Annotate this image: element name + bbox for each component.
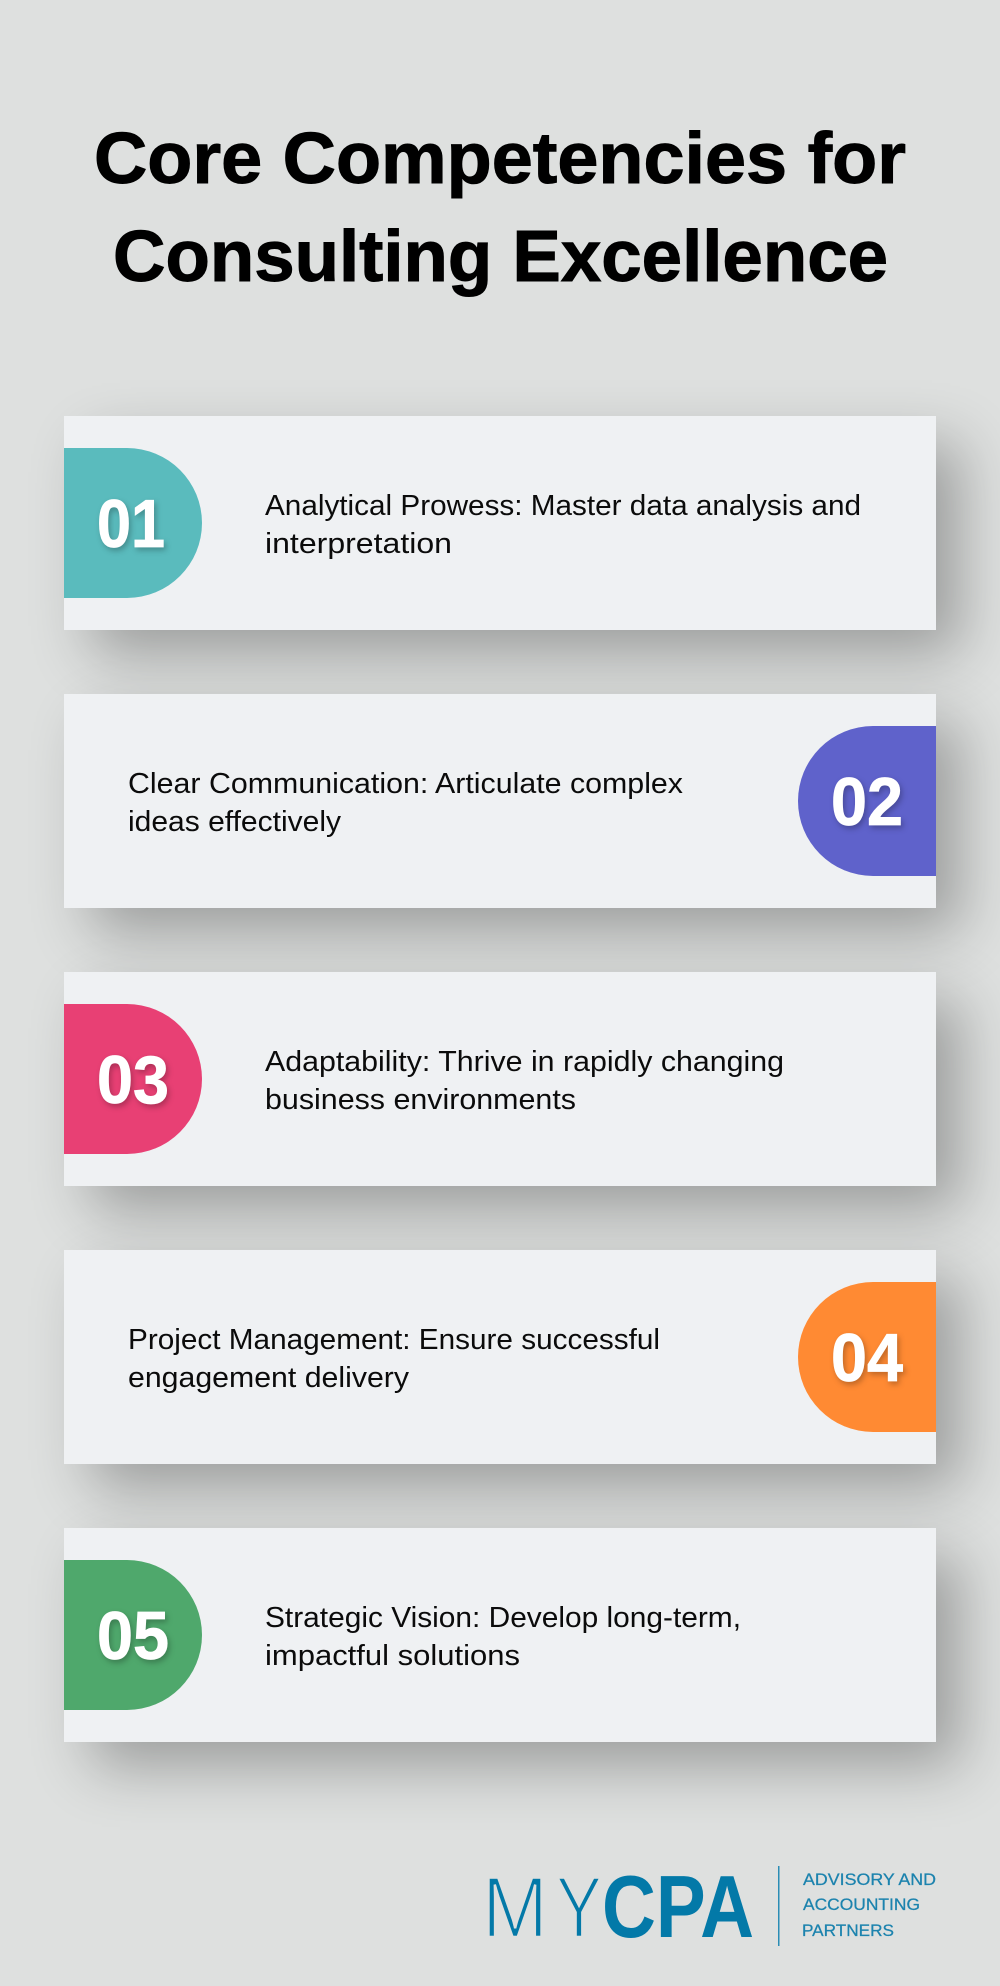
- text: project management: [128, 1324, 660, 1394]
- text: clear communication: ideas effectively: [128, 806, 342, 838]
- badge 03: [64, 1004, 202, 1154]
- logo: MYCPA: Y: [556, 1860, 602, 1956]
- title: Core Competencies for: [94, 119, 906, 199]
- title: [94, 119, 906, 297]
- badge 02: [798, 726, 936, 876]
- text: project management: engagement delivery: [128, 1362, 410, 1394]
- panel: card 03: [64, 972, 936, 1186]
- logo: MYCPA: ACCOUNTING: [803, 1896, 920, 1914]
- logo: MYCPA: PARTNERS: [802, 1922, 894, 1940]
- logo: MYCPA: ADVISORY AND: [803, 1871, 936, 1889]
- panel: card 05: [64, 1528, 936, 1742]
- text: analytical prowess: interpretation: [265, 528, 452, 560]
- text: adaptability: [265, 1046, 784, 1116]
- text: analytical prowess: Analytical Prowess: Master data analysis and: [265, 490, 861, 522]
- logo: MYCPA: CPA: [602, 1857, 754, 1956]
- text: clear communication: [128, 768, 684, 838]
- badge 01: [64, 448, 202, 598]
- panel: card 01: [64, 416, 936, 630]
- logo: MYCPA: M: [482, 1860, 548, 1956]
- text: adaptability: Adaptability: Thrive in rapidly changing: [265, 1046, 784, 1078]
- badge 01: 01: [97, 486, 165, 562]
- text: adaptability: business environments: [265, 1084, 576, 1116]
- text: project management: Project Management: Ensure successful: [128, 1324, 660, 1356]
- badge 04: 04: [831, 1320, 903, 1396]
- panel: card 02: [64, 694, 936, 908]
- panel: card 04: [64, 1250, 936, 1464]
- text: strategic vision: Strategic Vision: Develop long-term,: [265, 1602, 741, 1634]
- text: strategic vision: impactful solutions: [265, 1640, 520, 1672]
- badge 02: 02: [831, 764, 903, 840]
- text: clear communication: Clear Communication: Articulate complex: [128, 768, 684, 800]
- badge 05: [64, 1560, 202, 1710]
- title: Consulting Excellence: [113, 217, 888, 297]
- badge 04: [798, 1282, 936, 1432]
- text: strategic vision: [265, 1602, 741, 1672]
- badge 05: 05: [97, 1598, 169, 1674]
- badge 03: 03: [97, 1042, 169, 1118]
- text: analytical prowess: [265, 490, 861, 560]
